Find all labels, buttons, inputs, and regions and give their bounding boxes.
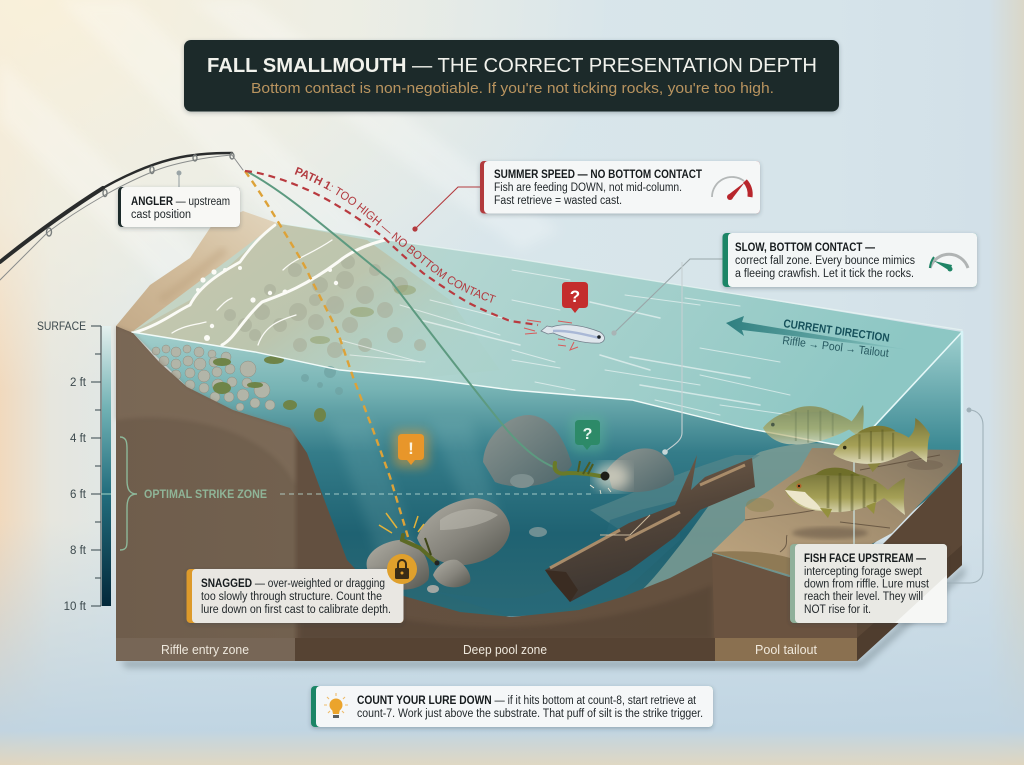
depth scale xyxy=(37,321,111,613)
river cross-section block xyxy=(116,211,965,668)
leader: summer xyxy=(415,187,480,229)
icon: slow gauge xyxy=(930,254,968,272)
foam xyxy=(133,225,385,345)
snagged jig xyxy=(379,513,440,566)
callout: snagged: SNAGGED — over-weighted or dragging xyxy=(201,578,385,590)
gravel on bank xyxy=(152,345,275,411)
callout: angler xyxy=(118,187,240,227)
leader lines xyxy=(179,173,983,583)
callout: summer speed xyxy=(480,161,760,214)
fish: middle xyxy=(833,418,930,472)
subtitle: Bottom contact is non-negotiable. If you're not ticking rocks, you're too high. xyxy=(251,81,774,97)
flow label: Riffle → Pool → Tailout xyxy=(782,335,890,360)
marker: red question: ? xyxy=(570,287,580,306)
silty river bed xyxy=(600,443,854,620)
callout: fish face upstream: NOT rise for it. xyxy=(804,604,871,616)
fish: back xyxy=(763,405,864,444)
callout: summer speed: Fish are feeding DOWN, not mid-column. xyxy=(494,182,682,194)
tailout front face xyxy=(712,553,857,661)
label: deep pool: Deep pool zone xyxy=(463,643,547,657)
surface flow streaks xyxy=(340,270,790,415)
depth labels: 10 ft xyxy=(64,601,87,613)
icon: lock xyxy=(387,554,417,584)
fish: front xyxy=(785,468,905,518)
fish group xyxy=(763,405,930,518)
upper rocks xyxy=(483,415,572,487)
leader: lure contact xyxy=(665,262,682,452)
strike zone label: OPTIMAL STRIKE ZONE xyxy=(144,489,267,501)
leader: angler xyxy=(178,173,180,187)
water edges xyxy=(132,223,962,545)
arrow xyxy=(726,316,910,350)
icon: light bulb xyxy=(324,693,348,718)
current label: CURRENT DIRECTION xyxy=(783,318,890,345)
marker: orange warning: ! xyxy=(408,439,414,458)
callout: count your lure down: COUNT YOUR LURE DOWN — if it hits bottom at count-8, start retrieve at xyxy=(357,695,697,707)
path 3: orange dashed line xyxy=(245,171,408,537)
callout: summer speed: Fast retrieve = wasted cast. xyxy=(494,195,622,207)
callout: fish face upstream: reach their level. They will xyxy=(804,591,923,603)
depth labels: 2 ft xyxy=(70,377,87,389)
soil front face xyxy=(116,326,715,661)
title banner xyxy=(184,40,839,112)
path 2: green retrieve line xyxy=(248,172,556,468)
title: FALL SMALLMOUTH — THE CORRECT PRESENTATION DEPTH xyxy=(207,55,817,77)
leader: slow xyxy=(614,259,723,333)
right water wall xyxy=(854,332,962,560)
path 1 label: PATH 1: TOO HIGH — NO BOTTOM CONTACT xyxy=(294,166,496,303)
soil relief xyxy=(116,326,295,485)
callout: fish face upstream: down from riffle. Lure must xyxy=(804,578,930,590)
marker: orange warning xyxy=(393,430,429,468)
depth labels: 6 ft xyxy=(70,489,87,501)
depth labels: SURFACE xyxy=(37,321,86,333)
rod and line xyxy=(0,153,243,280)
water surface xyxy=(132,223,962,448)
zone label bands xyxy=(116,545,962,661)
callout: slow bottom contact xyxy=(722,233,977,287)
minnow lure xyxy=(524,320,604,350)
current direction xyxy=(726,316,910,360)
callout: slow bottom contact: correct fall zone. Every bounce mimics xyxy=(735,255,915,267)
left rock xyxy=(367,540,429,590)
jig lure at bottom xyxy=(555,461,611,494)
callout: snagged: too slowly through structure. Count the xyxy=(201,591,382,603)
big rock xyxy=(417,498,510,565)
depth labels: 4 ft xyxy=(70,433,87,445)
callout: count your lure down: count-7. Work just above the substrate. That puff of silt is the strike trigger. xyxy=(357,708,703,720)
rocks xyxy=(367,415,674,593)
callout: snagged: lure down on first cast to calibrate depth. xyxy=(201,604,391,616)
callout: angler: cast position xyxy=(131,209,191,221)
callout: fish face upstream: intercepting forage swept xyxy=(804,566,923,578)
underwater xyxy=(132,332,854,620)
marker: red question xyxy=(562,282,588,313)
callout: slow bottom contact: a fleeing crawfish. Let it tick the rocks. xyxy=(735,268,914,280)
callout: fish face upstream xyxy=(790,544,947,623)
path 1: red dashed line xyxy=(245,171,538,325)
callout: fish face upstream: FISH FACE UPSTREAM — xyxy=(804,553,926,565)
optimal strike zone xyxy=(120,437,592,550)
sunken log xyxy=(545,455,755,602)
depth labels: 8 ft xyxy=(70,545,87,557)
sand bank xyxy=(116,211,277,334)
callout: summer speed: SUMMER SPEED — NO BOTTOM CONTACT xyxy=(494,169,702,181)
right rock xyxy=(433,560,470,587)
deep light shafts xyxy=(330,420,500,560)
marker: green question: ? xyxy=(583,426,592,443)
icon: fast gauge xyxy=(712,177,750,200)
riffle gravel surface xyxy=(132,223,500,378)
label: tailout: Pool tailout xyxy=(755,643,818,657)
depth labels xyxy=(37,321,87,613)
right side face xyxy=(857,463,962,661)
marker: green question xyxy=(570,415,605,453)
leader: fish xyxy=(947,410,983,583)
callout: angler: ANGLER — upstream xyxy=(131,196,230,208)
callout: count your lure down xyxy=(311,686,713,727)
callout: slow bottom contact: SLOW, BOTTOM CONTACT — xyxy=(735,242,875,254)
callout: snagged xyxy=(186,554,417,623)
drop shadow xyxy=(120,565,965,668)
rock slab shelf xyxy=(712,448,960,578)
silt puff xyxy=(594,463,630,491)
label: riffle entry: Riffle entry zone xyxy=(161,643,249,657)
